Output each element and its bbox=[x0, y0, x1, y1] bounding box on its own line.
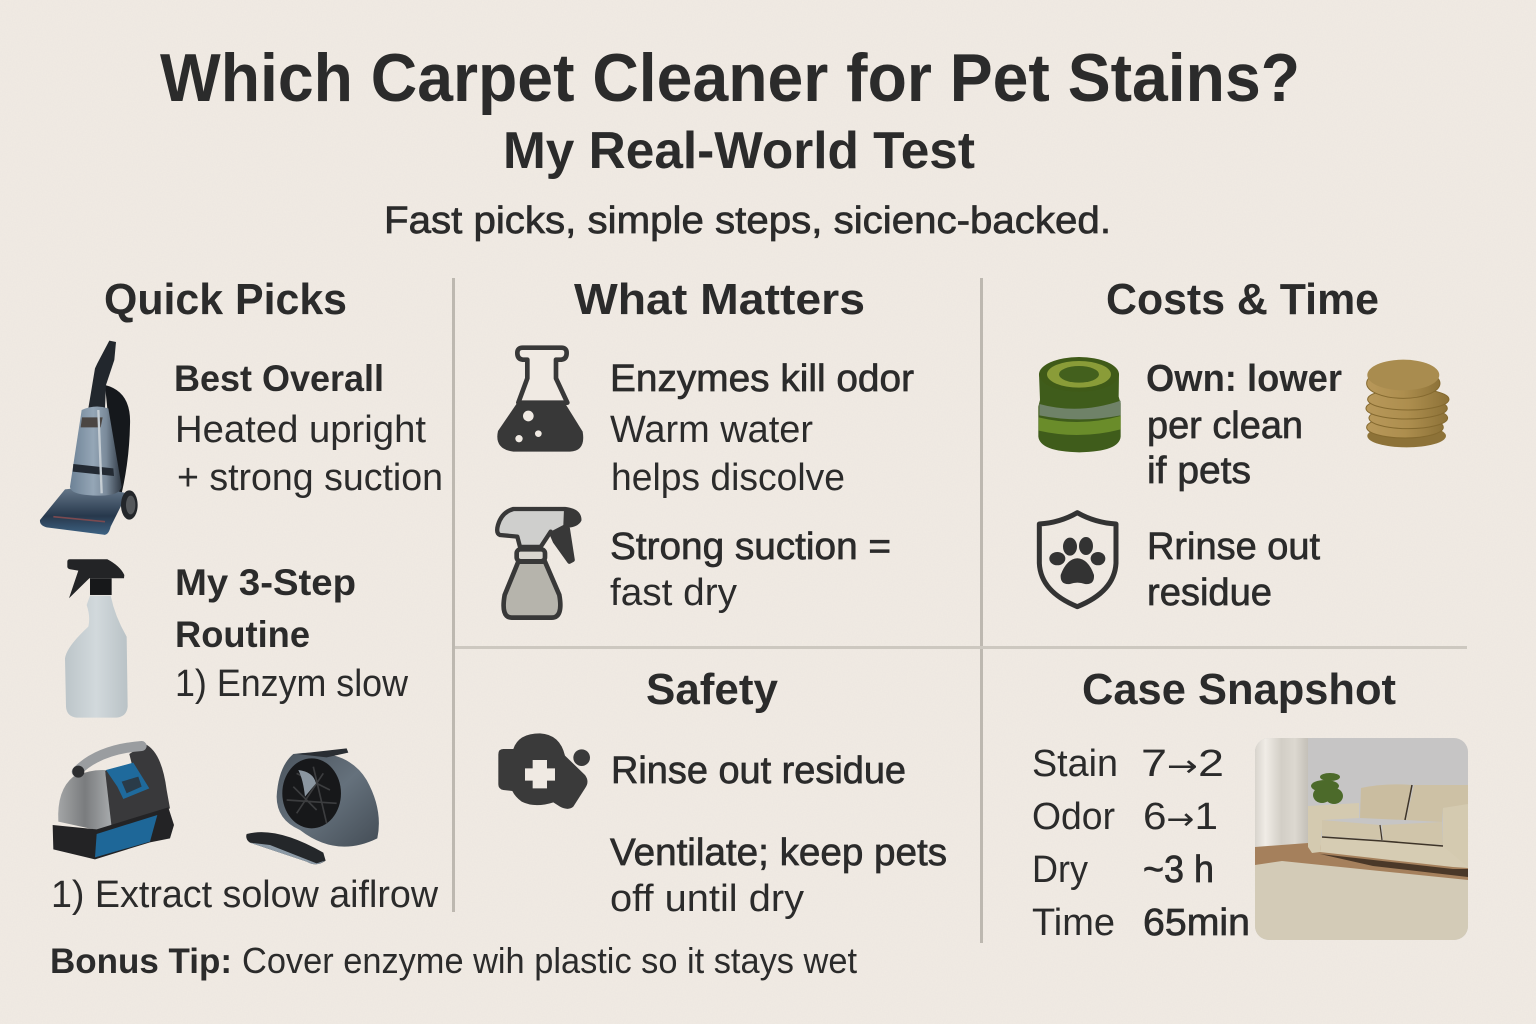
stats table: 6→1 bbox=[1143, 796, 1218, 838]
stats table: Time bbox=[1032, 902, 1115, 944]
panel: what matters bbox=[497, 275, 914, 618]
text: rrinse out residue: residue bbox=[1147, 572, 1272, 614]
text: best overall: + strong suction bbox=[177, 457, 443, 499]
title: Which Carpet Cleaner for Pet Stains? bbox=[160, 40, 1300, 116]
text: ventilate bbox=[610, 832, 947, 920]
text: strong suction bbox=[610, 526, 891, 614]
heading: safety: Safety bbox=[646, 665, 779, 714]
panel: case snapshot bbox=[1032, 665, 1468, 944]
text: strong suction: Strong suction = bbox=[610, 526, 891, 568]
text: own lower per clean bbox=[1146, 358, 1342, 492]
text: 3-step routine: Routine bbox=[175, 614, 310, 655]
stats table: Dry bbox=[1032, 849, 1088, 891]
panel: safety bbox=[498, 665, 947, 920]
caption: extract: 1) Extract solow aiflrow bbox=[51, 874, 439, 916]
bonus tip: Bonus Tip: bbox=[50, 942, 232, 981]
stats table: ~3 h bbox=[1143, 849, 1214, 891]
stats table: 7→2 bbox=[1141, 743, 1224, 785]
stats table bbox=[1032, 743, 1250, 944]
icon: paw shield bbox=[1039, 513, 1116, 607]
text: own lower per clean: per clean bbox=[1147, 405, 1303, 447]
panel: quick picks bbox=[40, 275, 443, 916]
photo: living room with sofa and carpet bbox=[1255, 738, 1468, 940]
stats table: Odor bbox=[1032, 796, 1115, 838]
heading: quick picks: Quick Picks bbox=[104, 275, 347, 324]
icon: flask bbox=[497, 348, 583, 452]
icon: spray bottle bbox=[497, 509, 579, 618]
text: rinse out residue: Rinse out residue bbox=[611, 750, 906, 792]
icon: air mover fan bbox=[246, 748, 379, 864]
text: ventilate: off until dry bbox=[610, 878, 804, 920]
text: 3-step routine bbox=[175, 562, 409, 705]
text: enzymes and warm water: Enzymes kill odor bbox=[610, 358, 914, 400]
heading: what matters: What Matters bbox=[574, 275, 865, 324]
text: best overall: Best Overall bbox=[174, 358, 384, 399]
text: rrinse out residue bbox=[1147, 526, 1320, 614]
icon: upright vacuum bbox=[40, 341, 138, 535]
icon: white spray bottle bbox=[65, 559, 128, 718]
text: ventilate: Ventilate; keep pets bbox=[610, 832, 947, 874]
text: rrinse out residue: Rrinse out bbox=[1147, 526, 1320, 568]
heading: case snapshot: Case Snapshot bbox=[1082, 665, 1396, 714]
subtitle: My Real-World Test bbox=[503, 122, 975, 180]
bonus tip: Cover enzyme wih plastic so it stays wet bbox=[242, 940, 857, 981]
text: strong suction: fast dry bbox=[610, 572, 737, 614]
stats table: 65min bbox=[1143, 902, 1250, 944]
stats table: Stain bbox=[1032, 743, 1118, 785]
text: enzymes and warm water bbox=[610, 358, 914, 499]
text: best overall bbox=[174, 358, 443, 499]
icon: portable spot cleaner bbox=[53, 744, 174, 859]
text: best overall: Heated upright bbox=[175, 409, 426, 451]
panel: costs and time bbox=[1038, 275, 1449, 614]
text: own lower per clean: if pets bbox=[1147, 450, 1251, 492]
text: enzymes and warm water: helps discolve bbox=[611, 457, 845, 499]
text: enzymes and warm water: Warm water bbox=[610, 409, 813, 451]
text: own lower per clean: Own: lower bbox=[1146, 358, 1342, 400]
text: 3-step routine: 1) Enzym slow bbox=[175, 663, 409, 705]
plant bbox=[1311, 773, 1343, 804]
tagline: Fast picks, simple steps, sicienc-backed. bbox=[384, 200, 1111, 242]
icon: green canister bbox=[1038, 357, 1121, 452]
icon: medical cross bbox=[498, 733, 590, 809]
text: 3-step routine: My 3-Step bbox=[175, 562, 356, 603]
heading: costs and time: Costs & Time bbox=[1106, 275, 1379, 324]
icon: coin stack bbox=[1366, 360, 1449, 447]
